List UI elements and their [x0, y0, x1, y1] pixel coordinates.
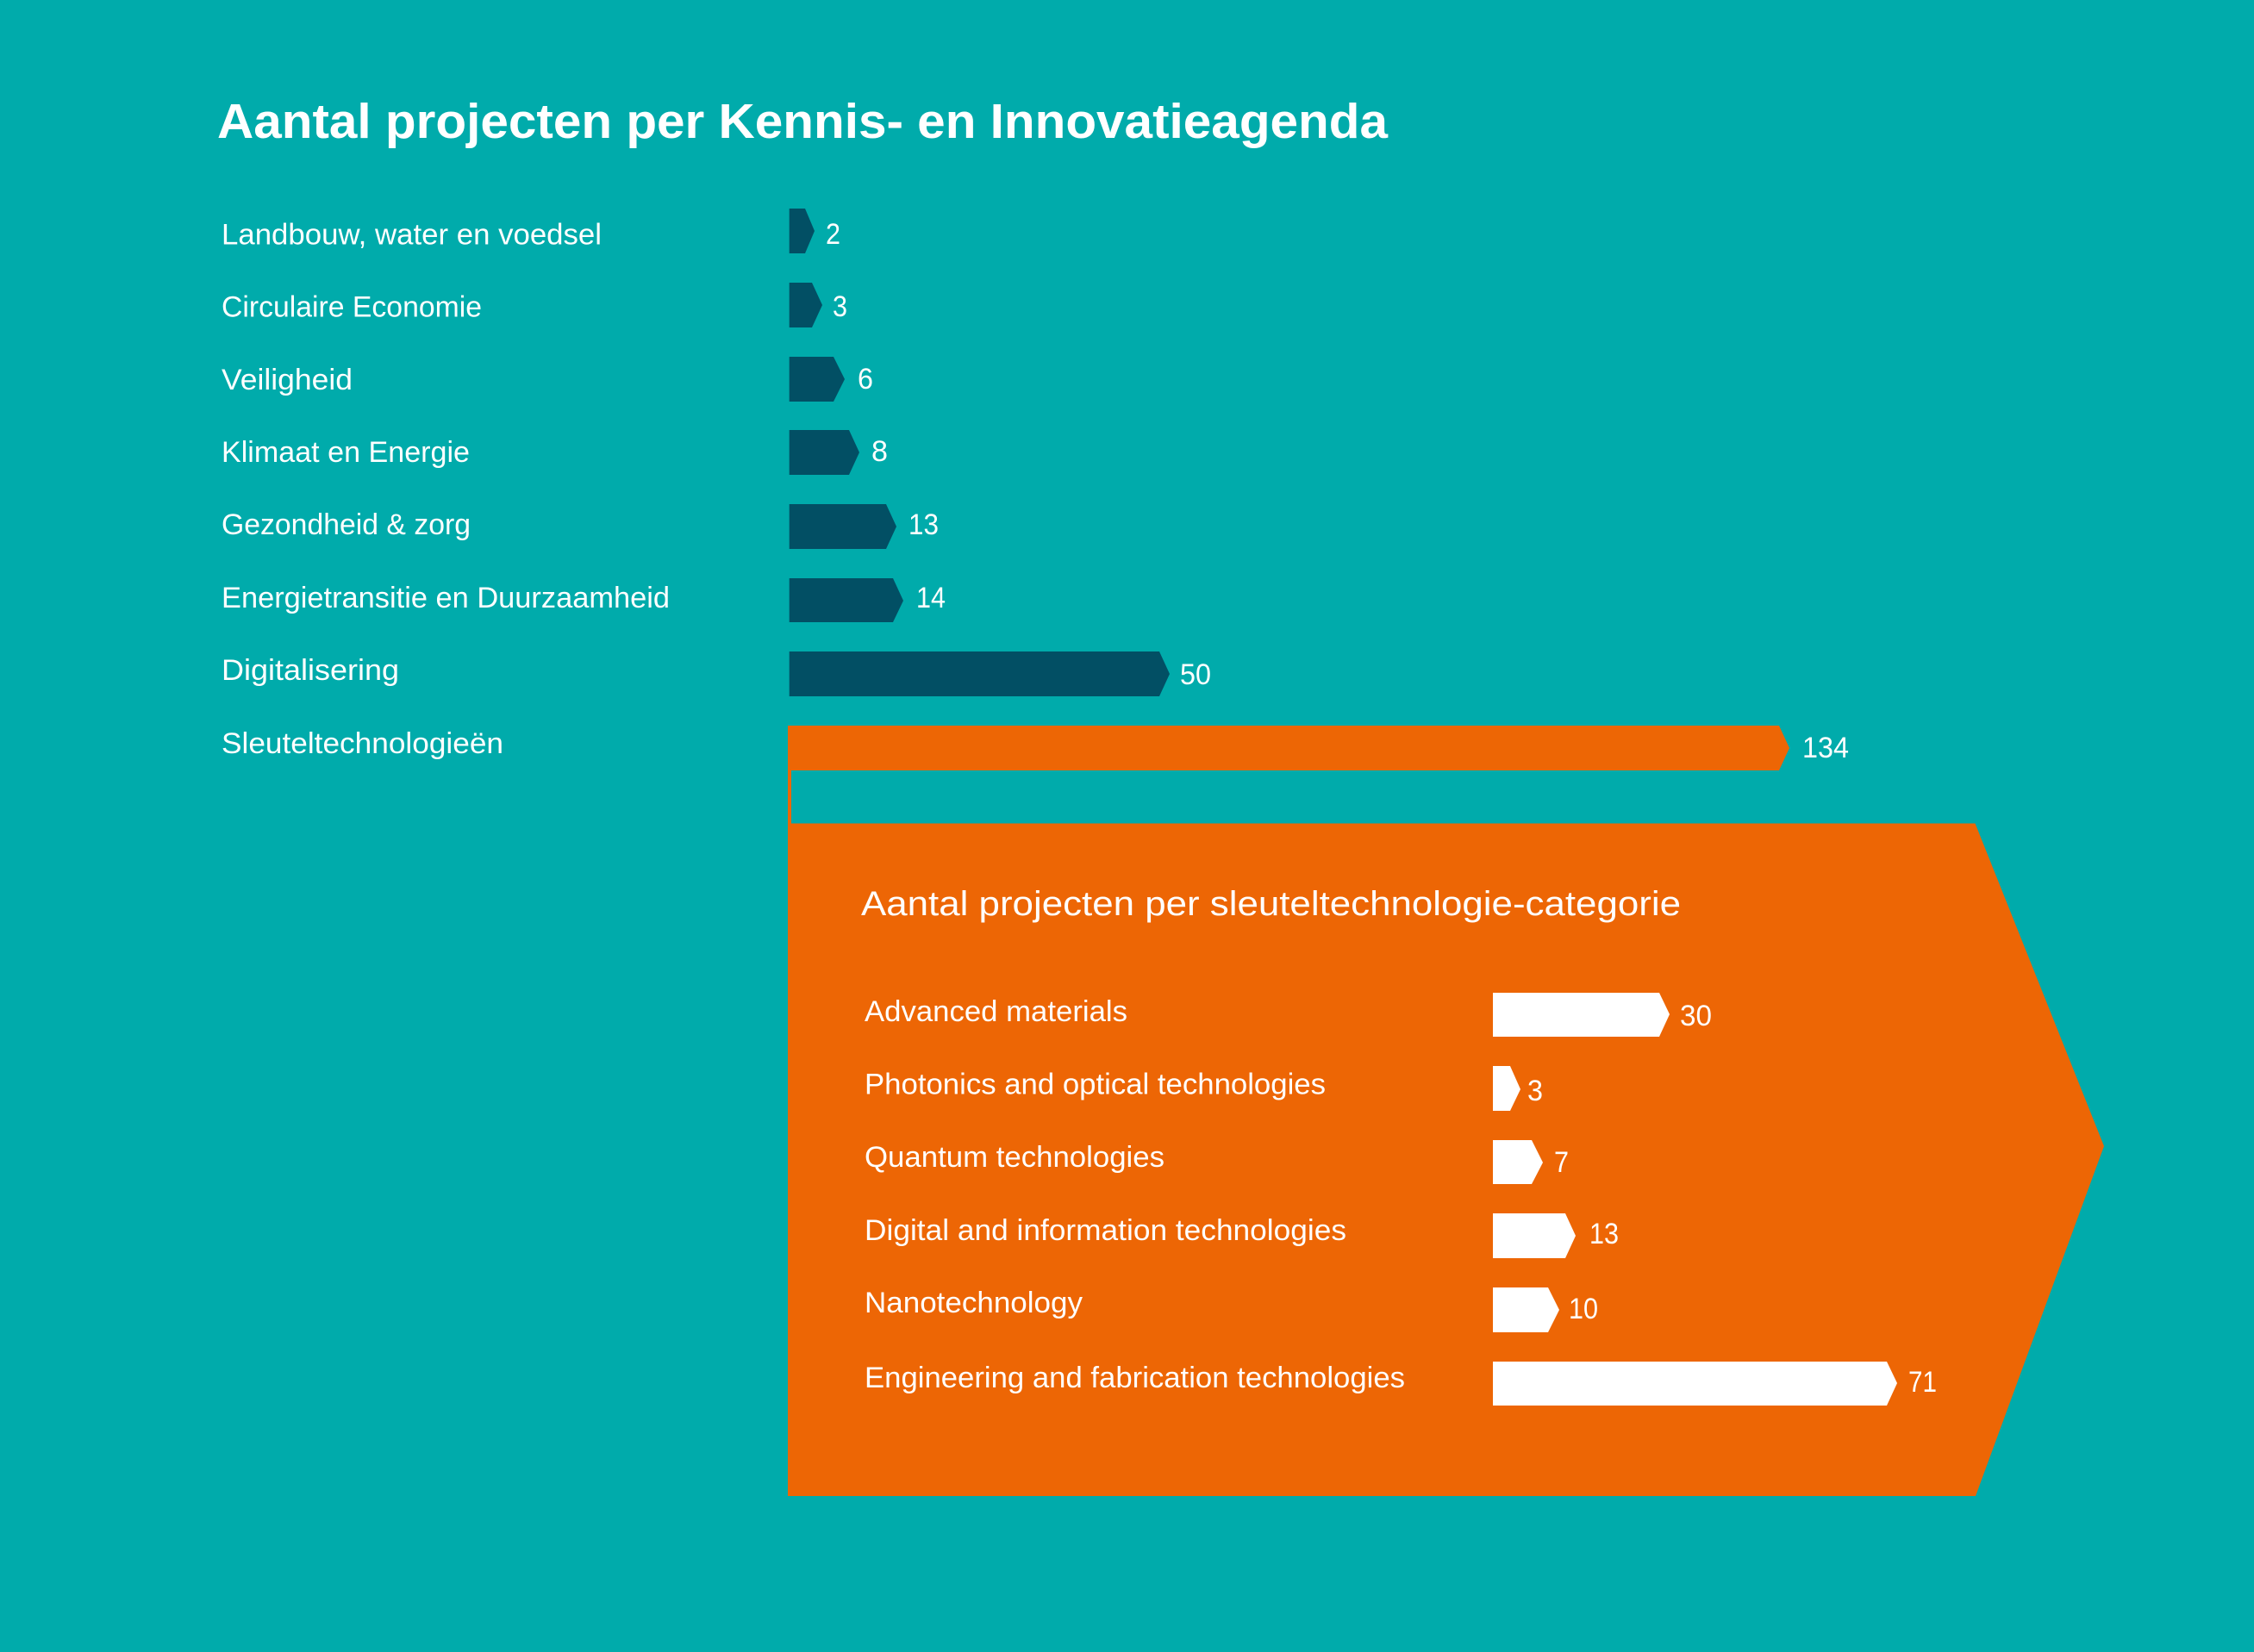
row: Quantum technologies: Quantum technologies	[865, 1141, 1164, 1174]
row: Nanotechnology: 10	[1569, 1293, 1598, 1325]
row: Nanotechnology	[865, 1287, 1598, 1332]
row: Nanotechnology: Nanotechnology	[865, 1287, 1083, 1319]
row: Quantum technologies	[865, 1140, 1569, 1184]
row: Digital and information technologies: Digital and information technologies	[865, 1214, 1346, 1247]
row: Sleuteltechnologieën	[222, 726, 1849, 770]
row: Photonics and optical technologies: Photonics and optical technologies	[865, 1069, 1326, 1101]
panel arrow shape	[788, 824, 2104, 1496]
row: Advanced materials	[865, 993, 1712, 1037]
row: Advanced materials: Advanced materials	[865, 995, 1127, 1028]
row: Energietransitie en Duurzaamheid: Energietransitie en Duurzaamheid	[222, 582, 670, 614]
row: Photonics and optical technologies: 3	[1527, 1075, 1543, 1107]
row: Landbouw, water en voedsel: 2	[826, 218, 840, 251]
row: Klimaat en Energie: 8	[871, 435, 888, 468]
row: Klimaat en Energie: Klimaat en Energie	[222, 436, 470, 469]
row: Quantum technologies: 7	[1554, 1146, 1569, 1179]
row: Veiligheid	[222, 357, 873, 402]
row: Engineering and fabrication technologies: 71	[1908, 1366, 1937, 1399]
row: Klimaat en Energie	[222, 430, 888, 475]
row: Circulaire Economie	[222, 283, 847, 327]
row: Veiligheid: 6	[858, 363, 873, 396]
row: Digitalisering	[222, 651, 1211, 696]
row: Sleuteltechnologieën: 134	[1802, 732, 1849, 764]
title: Aantal projecten per Kennis- en Innovatieagenda	[217, 94, 1389, 149]
row: Energietransitie en Duurzaamheid	[222, 578, 946, 622]
row: Energietransitie en Duurzaamheid: 14	[916, 582, 946, 614]
row: Digital and information technologies	[865, 1213, 1619, 1258]
row: Gezondheid & zorg: 13	[908, 508, 939, 541]
row: Engineering and fabrication technologies	[865, 1362, 1937, 1406]
panel heading: Aantal projecten per sleuteltechnologie-categorie	[861, 885, 1681, 923]
row: Landbouw, water en voedsel: Landbouw, water en voedsel	[222, 219, 602, 252]
row: Landbouw, water en voedsel	[222, 209, 840, 253]
row: Circulaire Economie: 3	[833, 290, 847, 323]
row: Veiligheid: Veiligheid	[222, 364, 353, 396]
row: Engineering and fabrication technologies: Engineering and fabrication technologies	[865, 1362, 1405, 1394]
row: Digitalisering: 50	[1180, 658, 1211, 691]
row: Photonics and optical technologies	[865, 1066, 1543, 1111]
connector from bar to panel	[788, 767, 791, 827]
row: Digitalisering: Digitalisering	[222, 654, 399, 687]
row: Advanced materials: 30	[1680, 1000, 1712, 1032]
row: Gezondheid & zorg	[222, 504, 939, 549]
row: Sleuteltechnologieën: Sleuteltechnologieën	[222, 727, 503, 760]
row: Gezondheid & zorg: Gezondheid & zorg	[222, 508, 471, 541]
bar chart: projecten per Kennis- en Innovatieagenda	[222, 209, 1849, 770]
row: Circulaire Economie: Circulaire Economie	[222, 291, 482, 324]
row: Digital and information technologies: 13	[1589, 1218, 1619, 1250]
panel: sleuteltechnologie-categorie	[788, 767, 2104, 1496]
